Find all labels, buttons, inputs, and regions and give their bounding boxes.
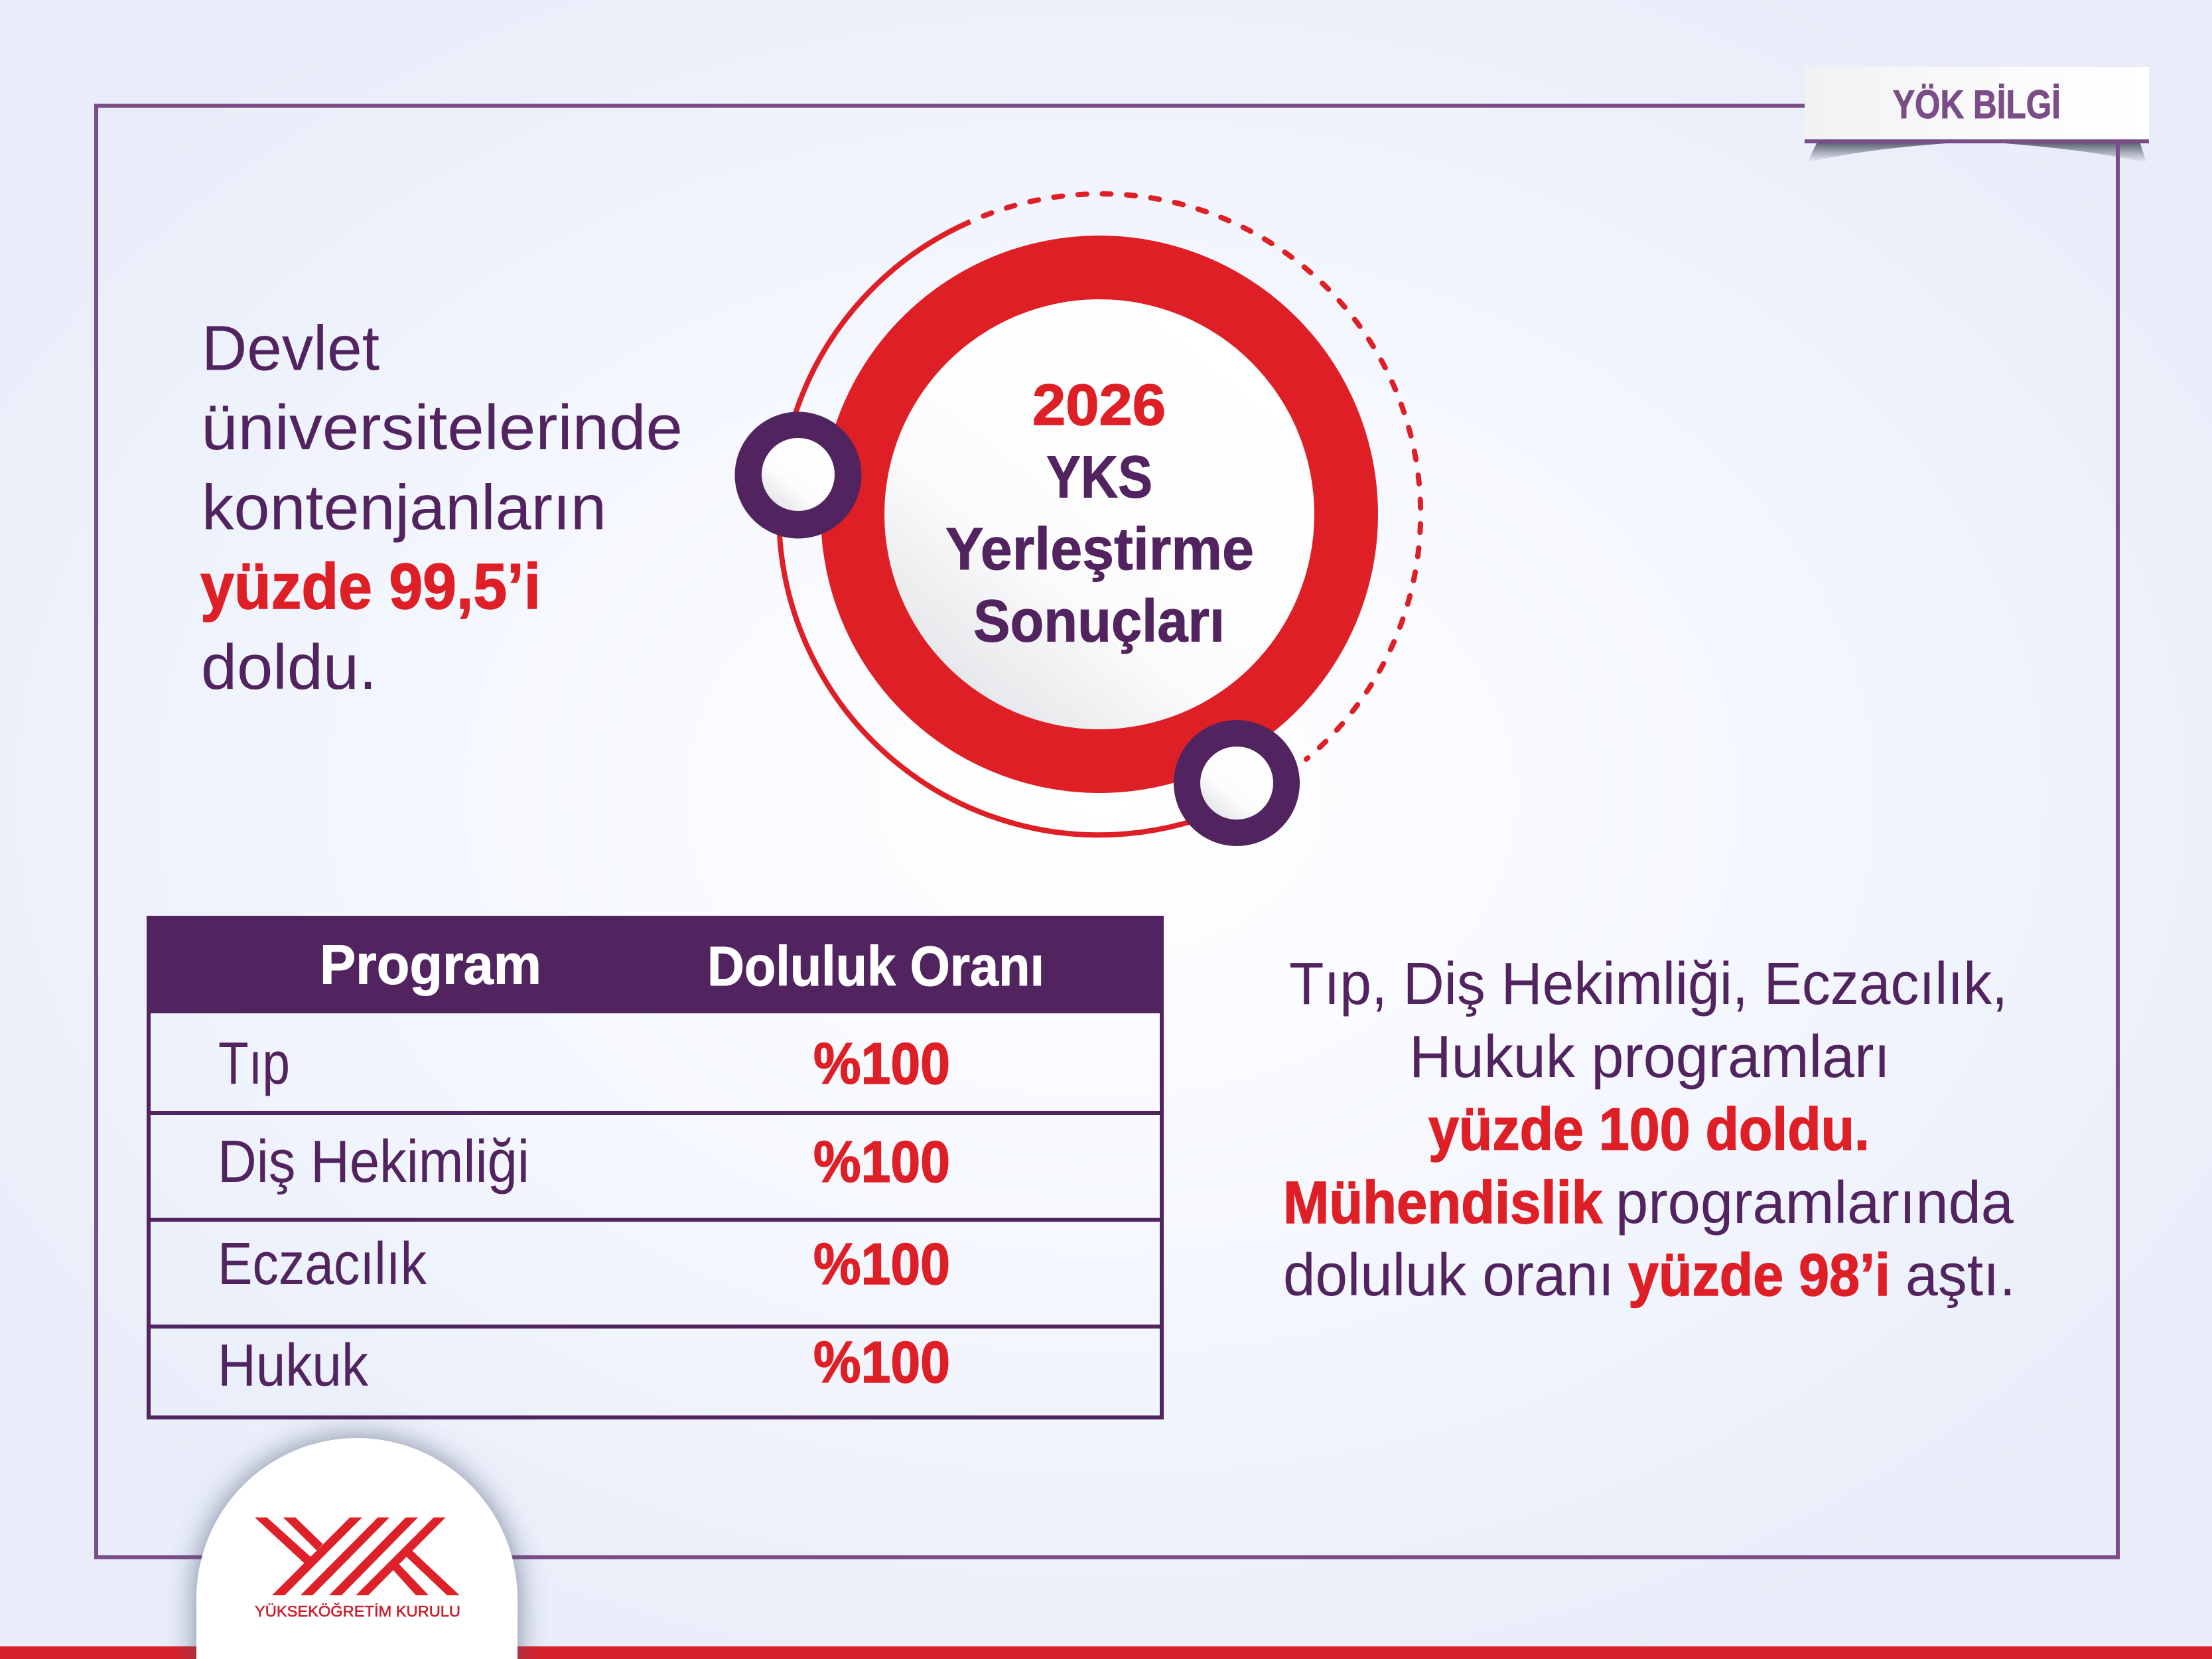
row: Hukuk xyxy=(218,1329,950,1399)
row: Hukuk: %100 xyxy=(813,1329,950,1395)
circle title text: 2026 xyxy=(1032,373,1166,437)
logo wordmark: YÜKSEKÖĞRETİM KURULU xyxy=(255,1603,460,1620)
logo mark xyxy=(255,1517,460,1595)
table header xyxy=(147,916,1164,1013)
left text block: üniversitelerinde xyxy=(201,392,683,463)
logo panel xyxy=(196,1438,518,1659)
bottom purple node xyxy=(1174,720,1300,846)
circle title text: YKS xyxy=(1046,445,1152,511)
left text block: kontenjanların xyxy=(202,472,606,543)
left text block: yüzde 99,5’i xyxy=(200,550,541,622)
outer frame xyxy=(96,106,2118,1557)
right text block: programlarında xyxy=(1616,1170,2014,1236)
table: program occupancy xyxy=(147,916,1164,1417)
right text block: Hukuk programları xyxy=(1409,1024,1890,1090)
left text block xyxy=(200,313,683,703)
thin solid arc xyxy=(779,222,1245,835)
row: Eczacılık: Eczacılık xyxy=(218,1231,427,1297)
circle title text xyxy=(945,373,1254,654)
right text block xyxy=(1283,951,2016,1309)
table header: Program xyxy=(320,933,541,995)
circle title text: Sonuçları xyxy=(973,588,1225,654)
tag: YÖK BİLGİ: YÖK BİLGİ xyxy=(1893,82,2061,127)
left text block: Devlet xyxy=(202,313,380,384)
right text block: Tıp, Diş Hekimliği, Eczacılık, xyxy=(1289,951,2008,1017)
row: Eczacılık: %100 xyxy=(813,1231,950,1297)
row: Hukuk: Hukuk xyxy=(218,1333,369,1399)
right text block: doluluk oranı xyxy=(1283,1242,1614,1309)
row: Tıp xyxy=(218,1031,950,1097)
tag: YÖK BİLGİ xyxy=(1805,67,2149,170)
circle title text: Yerleştirme xyxy=(945,516,1254,583)
row: Tıp: %100 xyxy=(813,1031,950,1096)
left purple node xyxy=(735,411,861,539)
right text block: yüzde 100 doldu. xyxy=(1428,1096,1870,1163)
dashed arc xyxy=(983,194,1420,759)
row: Diş Hekimliği xyxy=(218,1129,950,1195)
circular title graphic xyxy=(735,194,1420,846)
row: Diş Hekimliği: Diş Hekimliği xyxy=(218,1129,529,1195)
red ring xyxy=(821,236,1378,793)
right text block: yüzde 98’i xyxy=(1628,1242,1890,1309)
white centre disc xyxy=(884,299,1314,729)
left text block: doldu. xyxy=(201,632,377,703)
table header: Doluluk Oranı xyxy=(707,935,1044,997)
row: Tıp: Tıp xyxy=(218,1031,290,1097)
row: Diş Hekimliği: %100 xyxy=(813,1129,950,1194)
right text block: aştı. xyxy=(1905,1242,2016,1309)
row: Eczacılık xyxy=(218,1231,950,1297)
bottom red bar xyxy=(0,1646,2212,1659)
table frame and row lines xyxy=(147,918,1164,1417)
right text block: Mühendislik xyxy=(1283,1170,1603,1236)
